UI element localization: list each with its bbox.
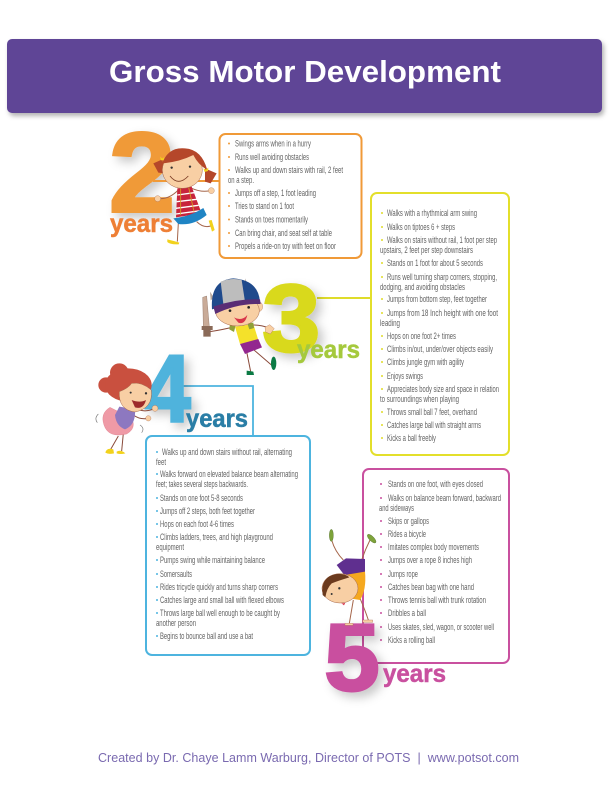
panel: 5 years: Throws tennis ball with trunk rotation — [388, 595, 486, 605]
panel: 5 years: Imitates complex body movements — [388, 542, 479, 552]
panel: 3 years: Catches large ball with straight arms — [387, 420, 481, 430]
panel: 5 years: Uses skates, sled, wagon, or scooter well — [388, 622, 494, 632]
panel: 2 years: Jumps off a step, 1 foot leading — [235, 188, 316, 198]
panel: 4 years: Rides tricycle quickly and turns sharp corners — [160, 582, 278, 592]
panel: 4 years: Hops on each foot 4-6 times — [160, 519, 234, 529]
panel: 4 years: feet — [156, 457, 166, 467]
title banner — [7, 39, 602, 113]
title banner: Gross Motor Development — [109, 54, 501, 89]
panel: 4 years: Pumps swing while maintaining balance — [160, 555, 265, 565]
panel: 5 years: Walks on balance beam forward, backward — [388, 493, 501, 503]
icon: boy doing a handstand (5 years) — [322, 529, 377, 625]
panel: 5 years: Catches bean bag with one hand — [388, 582, 474, 592]
panel: 5 years: and sideways — [379, 503, 414, 513]
panel: 2 years: Propels a ride-on toy with feet on floor — [235, 241, 336, 251]
panel: 3 years: Enjoys swings — [387, 371, 423, 381]
panel: 4 years: Walks up and down stairs without rail, alternating — [162, 447, 292, 457]
age 4 number and label — [144, 336, 253, 442]
age 4 number and label: years — [186, 405, 248, 433]
panel: 4 years: another person — [156, 618, 196, 628]
panel: 3 years: Runs well turning sharp corners, stopping, — [387, 272, 497, 282]
panel: 4 years: Somersaults — [160, 569, 192, 579]
panel: 3 years: leading — [380, 318, 400, 328]
panel: 5 years: Jumps over a rope 8 inches high — [388, 555, 472, 565]
panel: 3 years: Walks on tiptoes 6 + steps — [387, 222, 455, 232]
age 3 number and label: 3 — [262, 266, 320, 372]
panel: 3 years: Stands on 1 foot for about 5 seconds — [387, 258, 483, 268]
panel: 2 years: Runs well avoiding obstacles — [235, 152, 309, 162]
panel: 4 years — [146, 436, 310, 655]
age 2 number and label: 2 — [109, 110, 175, 236]
panel: 4 years: Stands on one foot 5-8 seconds — [160, 493, 243, 503]
panel: 2 years: Swings arms when in a hurry — [235, 138, 311, 148]
panel: 3 years: Climbs jungle gym with agility — [387, 357, 464, 367]
panel: 5 years: Jumps rope — [388, 569, 418, 579]
panel: 3 years: dodging, and avoiding obstacles — [380, 282, 465, 292]
age 5 number and label: 5 — [324, 605, 380, 711]
panel: 4 years: equipment — [156, 542, 184, 552]
panel: 4 years: Climbs ladders, trees, and high playground — [160, 532, 273, 542]
age 2 number and label — [109, 110, 219, 238]
panel: 2 years: Walks up and down stairs with rail, 2 feet — [235, 165, 343, 175]
panel: 3 years: upstairs, 2 feet per step downstairs — [380, 245, 473, 255]
icon: boy with helmet and sword (3 years) — [202, 278, 276, 375]
panel: 5 years: Rides a bicycle — [388, 529, 426, 539]
age 4 number and label: 4 — [144, 336, 191, 442]
panel: 2 years — [220, 134, 362, 258]
panel: 2 years: on a step. — [228, 175, 254, 185]
panel: 5 years — [363, 469, 509, 663]
age 5 number and label — [324, 605, 446, 711]
panel: 3 years: Walks on stairs without rail, 1 foot per step — [387, 235, 497, 245]
panel: 3 years: Hops on one foot 2+ times — [387, 331, 456, 341]
panel: 3 years: Walks with a rhythmical arm swing — [387, 208, 477, 218]
panel: 3 years: Appreciates body size and space in relation — [387, 384, 499, 394]
panel: 4 years: Throws large ball well enough to be caught by — [160, 608, 280, 618]
panel: 4 years: Catches large and small ball with flexed elbows — [160, 595, 284, 605]
panel: 4 years: feet; takes several steps backwards. — [156, 479, 248, 489]
panel: 3 years: Jumps from bottom step, feet together — [387, 294, 487, 304]
icon: girl running (2 years) — [153, 148, 217, 244]
panel: 2 years: Can bring chair, and seat self at table — [235, 228, 332, 238]
age 5 number and label: years — [383, 660, 446, 688]
panel: 5 years: Stands on one foot, with eyes closed — [388, 479, 483, 489]
panel: 3 years: Throws small ball 7 feet, overhand — [387, 407, 477, 417]
age 3 number and label: years — [297, 336, 360, 364]
icon: dancing girl (4 years) — [96, 363, 158, 454]
panel: 5 years: Dribbles a ball — [388, 608, 426, 618]
panel: 4 years: Begins to bounce ball and use a bat — [160, 631, 253, 641]
panel: 3 years — [371, 193, 509, 455]
panel: 2 years: Tries to stand on 1 foot — [235, 201, 294, 211]
age 2 number and label: years — [110, 210, 173, 238]
panel: 3 years: Kicks a ball freebly — [387, 433, 436, 443]
panel: 2 years: Stands on toes momentarily — [235, 214, 308, 224]
footer credit: Created by Dr. Chaye Lamm Warburg, Director of POTS | www.potsot.com — [98, 751, 519, 765]
panel: 3 years: to surroundings when playing — [380, 394, 459, 404]
panel: 3 years: Climbs in/out, under/over objects easily — [387, 344, 493, 354]
age 3 number and label — [262, 266, 371, 372]
panel: 5 years: Kicks a rolling ball — [388, 635, 435, 645]
panel: 4 years: Jumps off 2 steps, both feet together — [160, 506, 255, 516]
panel: 4 years: Walks forward on elevated balance beam alternating — [160, 469, 298, 479]
panel: 5 years: Skips or gallops — [388, 516, 429, 526]
panel: 3 years: Jumps from 18 Inch height with one foot — [387, 308, 498, 318]
